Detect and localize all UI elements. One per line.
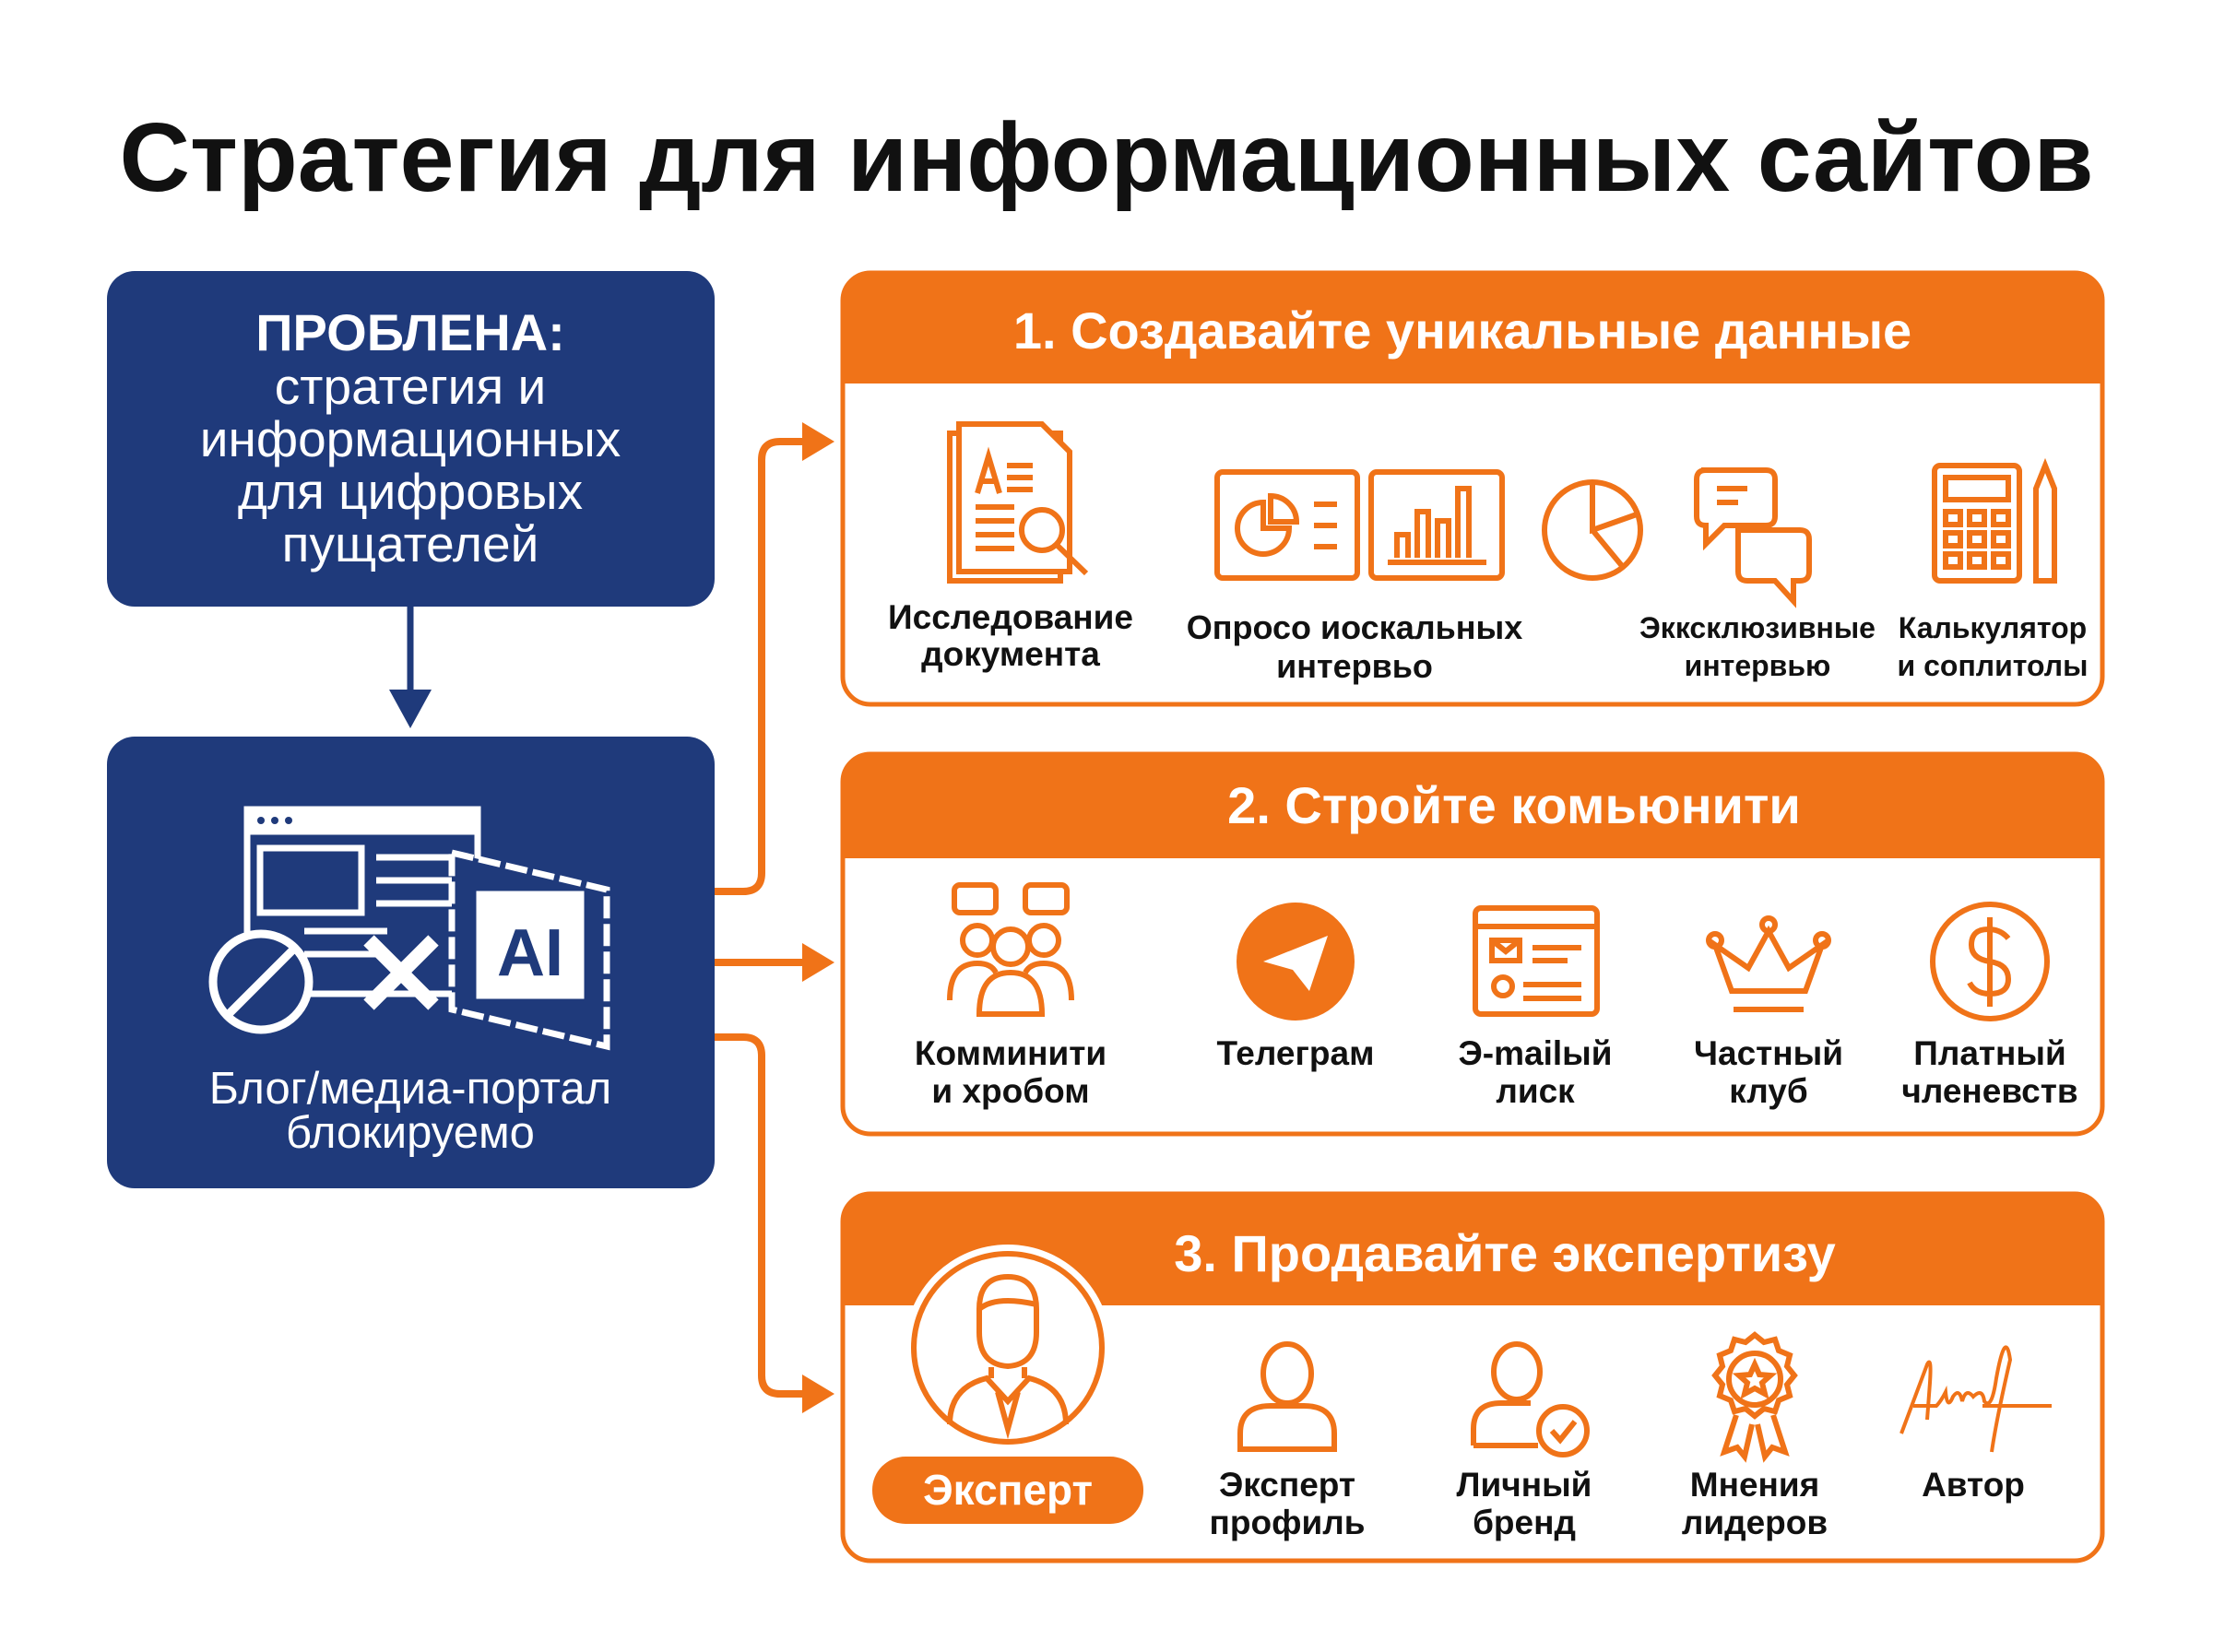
panel: 1 unique data: Опросо иоскальных — [1187, 608, 1522, 646]
icon: email list — [1475, 908, 1597, 1014]
panel: blocked blog: блокируемо — [286, 1108, 535, 1158]
panel: 1 unique data: 1. Создавайте уникальные данные — [1013, 301, 1911, 360]
panel: 3 expertise: лидеров — [1682, 1504, 1828, 1541]
panel: 3 expertise: Мнения — [1690, 1466, 1819, 1504]
panel: 1 unique data: Экксклюзивные — [1639, 611, 1876, 644]
arrows: to panels — [715, 422, 834, 1413]
icon: personal brand — [1473, 1344, 1587, 1455]
panel: 3 expertise: Эксперт — [1219, 1466, 1355, 1504]
icon: survey screens — [1217, 472, 1502, 578]
panel: 1 unique data: интервью — [1685, 649, 1830, 682]
title: Стратегия для информационных сайтов — [119, 103, 2094, 212]
badge: expert: Эксперт — [923, 1466, 1093, 1514]
icon: calculator — [1935, 466, 2054, 581]
panel: 2 community — [843, 754, 2102, 1134]
panel: 2 community: членевств — [1901, 1072, 2078, 1110]
panel: 2 community: Платный — [1913, 1034, 2066, 1072]
panel: 1 unique data: Исследование — [888, 598, 1133, 636]
panel: problem: пущателей — [282, 515, 538, 572]
panel: problem: информационных — [200, 410, 621, 467]
icon: signature — [1901, 1347, 2052, 1452]
icon: award — [1715, 1335, 1794, 1457]
panel: 1 unique data: Калькулятор — [1899, 611, 2087, 644]
panel: blocked blog: Блог/медиа-портал — [209, 1064, 611, 1114]
panel: 2 community: Телеграм — [1217, 1034, 1374, 1072]
icon: pie chart — [1544, 482, 1640, 578]
panel: 2 community: Частный — [1694, 1034, 1843, 1072]
icon: community — [950, 885, 1071, 1014]
panel: 3 expertise: Личный — [1457, 1466, 1592, 1504]
arrow: down — [389, 607, 432, 728]
panel: problem — [107, 271, 715, 607]
icon: browser blocked by AI wall — [213, 809, 607, 1046]
panel: 3 expertise — [843, 1194, 2102, 1561]
panel: blocked blog: AI — [497, 916, 563, 990]
panel: problem: ПРОБЛЕНА: — [255, 303, 565, 361]
icon: expert profile — [1240, 1344, 1334, 1449]
panel: 2 community: лиск — [1496, 1072, 1575, 1110]
panel: 1 unique data: документа — [921, 635, 1100, 673]
panel: problem: стратегия и — [275, 358, 546, 415]
panel: 3 expertise: бренд — [1473, 1504, 1576, 1541]
badge: expert — [872, 1457, 1143, 1524]
panel: 1 unique data — [843, 273, 2102, 704]
panel: 3 expertise: Автор — [1922, 1466, 2025, 1504]
panel: 1 unique data: и соплитолы — [1898, 649, 2088, 682]
icon: dollar — [1933, 904, 2047, 1019]
panel: 2 community: 2. Стройте комьюнити — [1227, 776, 1801, 834]
panel: 1 unique data: интервьо — [1276, 647, 1433, 685]
icon: chat bubbles — [1697, 470, 1809, 601]
panel: 3 expertise: 3. Продавайте экспертизу — [1174, 1224, 1836, 1282]
icon: expert portrait — [905, 1245, 1111, 1451]
panel: 2 community: Э-mailый — [1458, 1034, 1613, 1072]
icon: document research — [950, 424, 1086, 581]
icon: telegram — [1237, 903, 1355, 1021]
panel: 3 expertise: профиль — [1210, 1504, 1365, 1541]
panel: 2 community: и хробом — [931, 1072, 1090, 1110]
panel: problem: для цифровых — [238, 463, 583, 520]
panel: 2 community: Комминити — [915, 1034, 1106, 1072]
panel: blocked blog — [107, 737, 715, 1188]
icon: crown — [1709, 918, 1828, 1009]
panel: 2 community: клуб — [1729, 1072, 1808, 1110]
